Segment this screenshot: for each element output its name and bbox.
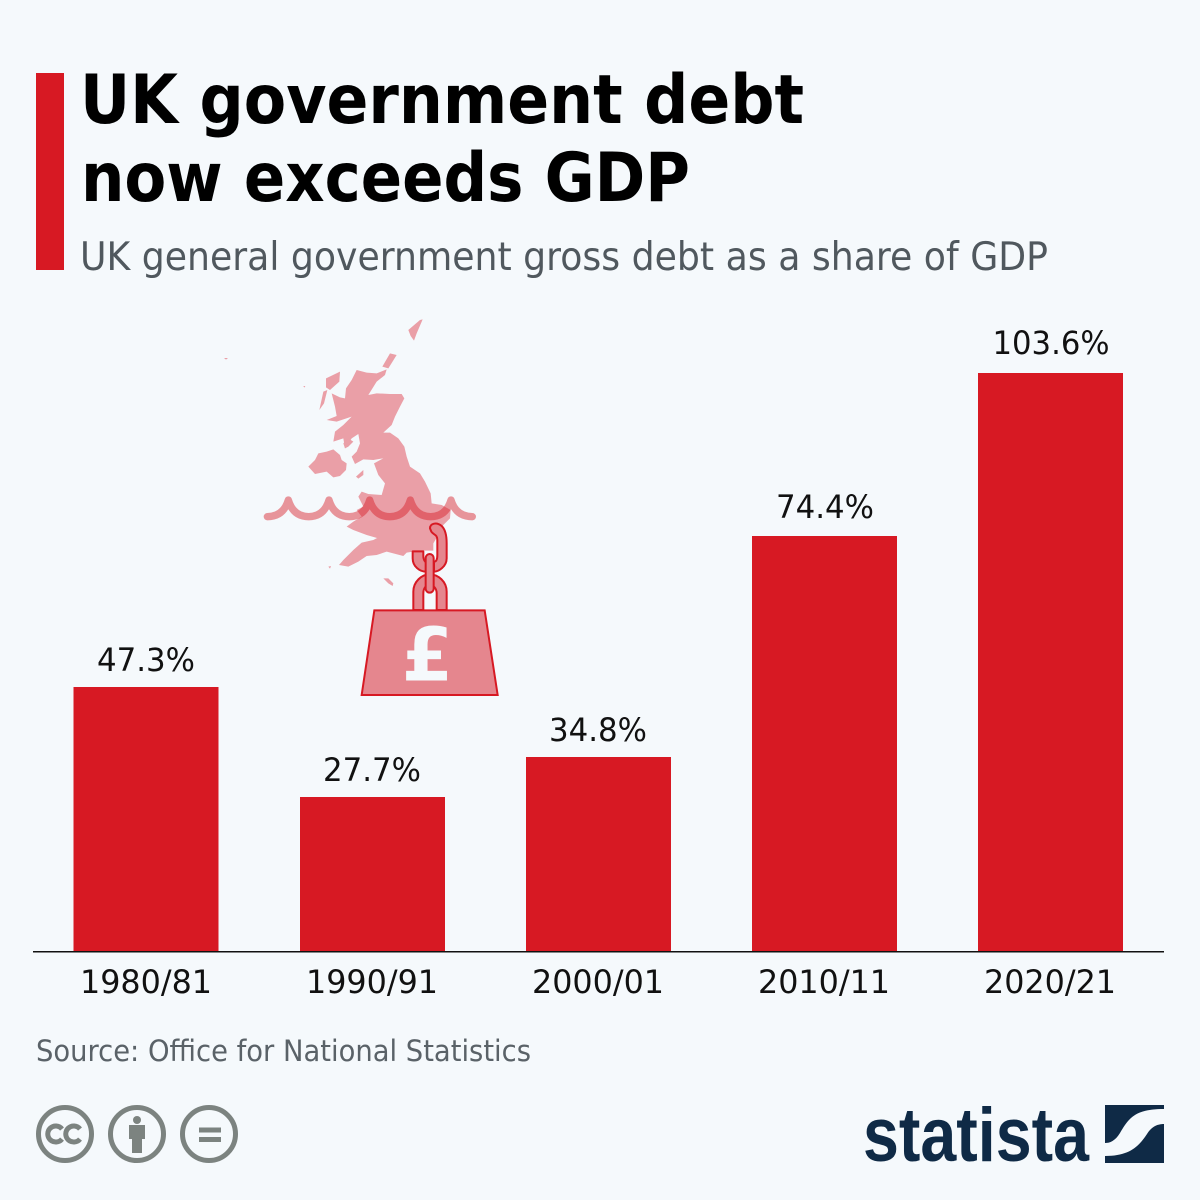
title: UK government debt bbox=[80, 61, 804, 140]
category labels bbox=[80, 963, 1116, 1001]
value labels: 74.4% bbox=[776, 488, 874, 526]
icon: pound weight bbox=[362, 610, 498, 699]
icon: attribution bbox=[110, 1108, 164, 1160]
logo mark bbox=[1105, 1105, 1164, 1163]
statista logo bbox=[863, 1093, 1164, 1178]
title accent bar bbox=[36, 73, 64, 270]
icon: chain bbox=[413, 524, 447, 610]
value labels: 34.8% bbox=[549, 711, 647, 749]
wordmark: statista bbox=[863, 1093, 1090, 1178]
category labels: 1990/91 bbox=[306, 963, 438, 1001]
icon: waves bbox=[267, 500, 472, 517]
value labels: 103.6% bbox=[992, 324, 1110, 362]
category labels: 1980/81 bbox=[80, 963, 212, 1001]
bars bbox=[74, 373, 1123, 951]
category labels: 2010/11 bbox=[758, 963, 890, 1001]
title: now exceeds GDP bbox=[81, 139, 690, 218]
axis line bbox=[33, 951, 1164, 952]
category labels: 2000/01 bbox=[532, 963, 664, 1001]
source: Source: Office for National Statistics bbox=[36, 1034, 531, 1068]
bar chart bbox=[33, 324, 1164, 1001]
icon: creative commons licence bbox=[38, 1108, 236, 1160]
icon: cc bbox=[38, 1108, 92, 1160]
value labels: 47.3% bbox=[97, 641, 195, 679]
pound sign: £ bbox=[402, 613, 453, 699]
illustration: UK map sinking with pound weight bbox=[224, 319, 498, 699]
subtitle: UK general government gross debt as a share of GDP bbox=[80, 235, 1048, 280]
icon: share alike bbox=[182, 1108, 236, 1160]
icon: UK map bbox=[224, 319, 451, 586]
title bbox=[80, 61, 804, 218]
category labels: 2020/21 bbox=[984, 963, 1116, 1001]
value labels bbox=[97, 324, 1110, 789]
value labels: 27.7% bbox=[323, 751, 421, 789]
